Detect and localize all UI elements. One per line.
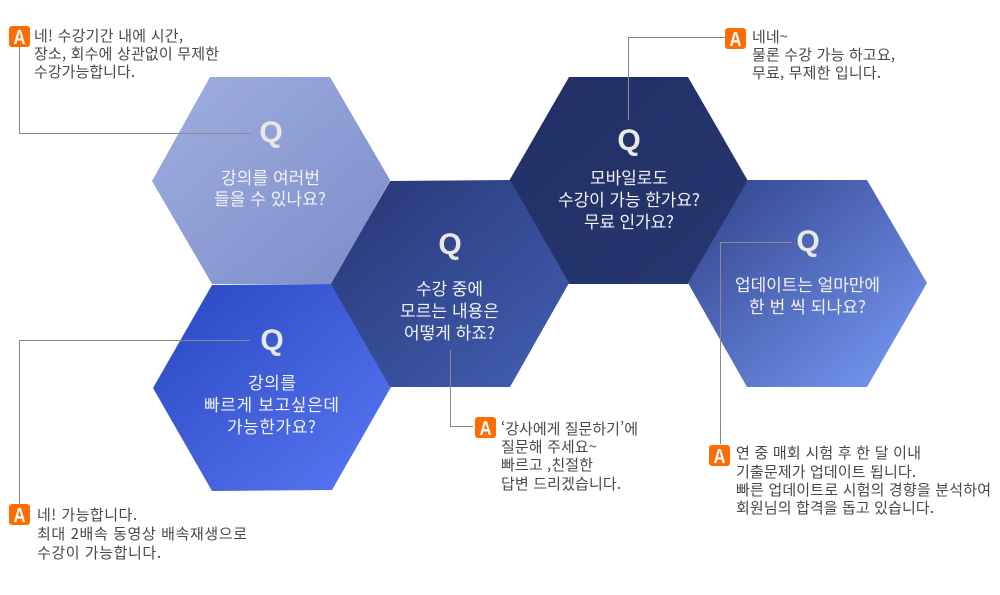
hexagon: mobile access xyxy=(509,77,748,284)
question 5 text xyxy=(735,225,880,318)
question 3 text: 모르는 내용은 xyxy=(400,297,499,322)
question 4 text: 수강이 가능 한가요? xyxy=(558,186,700,211)
question 3 text: 어떻게 하죠? xyxy=(404,319,495,344)
answer 3: 질문해 주세요~ xyxy=(501,436,597,457)
question 2 text xyxy=(204,324,339,438)
question 1 text: 들을 수 있나요? xyxy=(214,185,326,210)
answer 2: 최대 2배속 동영상 배속재생으로 xyxy=(37,523,247,544)
answer 4: 물론 수강 가능 하고요, xyxy=(752,44,895,65)
connector 2 xyxy=(20,340,250,504)
answer 1: 네! 수강기간 내에 시간, xyxy=(34,25,183,46)
answer 3 xyxy=(475,417,638,494)
answer 4 xyxy=(725,26,895,83)
answer 5: 회원님의 합격을 돕고 있습니다. xyxy=(736,497,934,518)
answer 3: 빠르고 ,친절한 xyxy=(501,454,593,475)
answer 3: ‘강사에게 질문하기’에 xyxy=(501,418,638,439)
question 1 text: Q xyxy=(259,116,283,149)
answer 1: 수강가능합니다. xyxy=(34,61,135,82)
answer 4: 무료, 무제한 입니다. xyxy=(752,62,881,83)
hexagon: asking questions xyxy=(331,180,569,387)
question 5 text: Q xyxy=(796,225,820,258)
question 2 text: Q xyxy=(260,324,284,357)
question 2 text: 가능한가요? xyxy=(227,413,316,438)
question 2 text: 강의를 xyxy=(248,369,296,394)
question 3 text xyxy=(400,228,499,344)
answer 1: 장소, 회수에 상관없이 무제한 xyxy=(34,43,219,64)
answer 5: 연 중 매회 시험 후 한 달 이내 xyxy=(736,442,921,463)
answer 4: A xyxy=(730,29,742,51)
connector 5 xyxy=(720,242,792,444)
hexagon: speed playback xyxy=(153,284,391,491)
answer 1: A xyxy=(14,27,26,49)
answer 5: 기출문제가 업데이트 됩니다. xyxy=(736,461,916,482)
hexagon: watch lectures repeatedly xyxy=(152,77,390,284)
answer 2 xyxy=(9,504,247,563)
question 3 text: Q xyxy=(438,228,462,261)
question 4 text: 무료 인가요? xyxy=(584,208,674,233)
answer 3: A xyxy=(480,418,492,440)
question 1 text: 강의를 여러번 xyxy=(221,164,320,189)
answer 4: 네네~ xyxy=(752,26,788,47)
question 2 text: 빠르게 보고싶은데 xyxy=(204,391,339,416)
question 1 text xyxy=(214,116,326,210)
connector 4 xyxy=(628,38,725,120)
question 4 text: Q xyxy=(617,124,641,157)
question 5 text: 한 번 씩 되나요? xyxy=(749,293,866,318)
question 5 text: 업데이트는 얼마만에 xyxy=(735,271,880,296)
answer 5: A xyxy=(714,446,726,468)
answer 5 xyxy=(709,442,991,518)
hexagon: update frequency xyxy=(688,180,927,387)
answer 2: 네! 가능합니다. xyxy=(37,504,137,525)
connector 1 xyxy=(20,47,250,134)
question 3 text: 수강 중에 xyxy=(416,275,483,300)
question 4 text: 모바일로도 xyxy=(590,164,668,189)
answer 5: 빠른 업데이트로 시험의 경향을 분석하여 xyxy=(736,479,991,500)
answer 1 xyxy=(9,25,219,82)
connector 3 xyxy=(450,350,473,426)
answer 2: A xyxy=(14,505,26,527)
answer 2: 수강이 가능합니다. xyxy=(37,542,161,563)
answer 3: 답변 드리겠습니다. xyxy=(501,473,621,494)
question 4 text xyxy=(558,124,700,233)
